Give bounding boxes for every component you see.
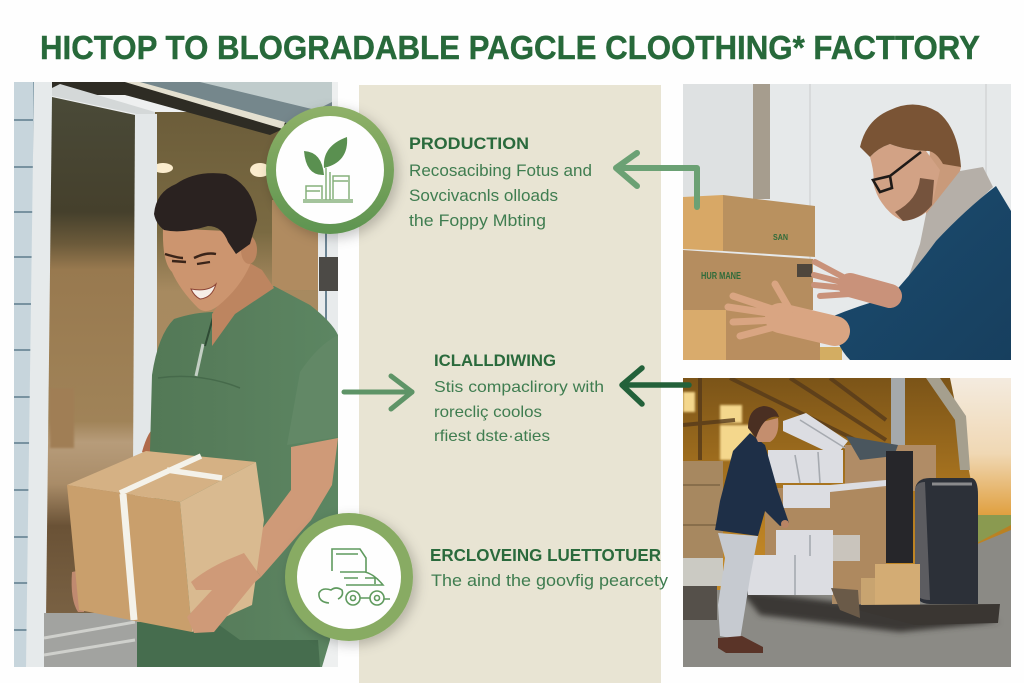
cabinet seen through pane [49,423,75,449]
forearm [256,438,338,577]
eyes and brows [165,254,216,264]
carton labels: HUR MANE [701,271,741,282]
interior right pane [155,112,318,352]
grass verge [973,515,1011,545]
text block: delivery [430,545,669,590]
forklift platform [858,604,1000,625]
upper hand [814,262,890,296]
text block: compliance [434,352,604,445]
shoes [718,636,763,653]
heading: ERCLOVEING LUETTOTUER [430,545,661,565]
carton labels: SAN [773,233,788,242]
hem seam [158,376,240,388]
zip placket [196,344,203,376]
roof trusses [683,378,886,460]
icon: document and truck outline [319,549,390,605]
wall column [753,84,770,199]
body copy: Recosacibing Fotus and [409,162,592,180]
scarf [906,167,993,284]
neckline [204,318,212,346]
trousers [718,533,758,640]
face [163,228,250,311]
hair [748,406,779,438]
siding on the left wall [14,82,34,667]
stacked brown cartons behind [683,461,723,561]
right door post [318,232,320,314]
arm behind parcel [142,432,150,452]
text block: production [409,134,592,230]
neck [212,262,274,346]
icon: production leaf badge [266,106,394,234]
body copy [434,379,604,445]
neck [926,150,961,215]
heading: ICLALLDIWING [434,352,556,370]
body copy: rorecliç coolos [434,404,542,421]
door header [52,82,332,135]
body copy: the Foppy Mbting [409,212,546,230]
body copy: Stis compaclirory with [434,379,604,396]
hair [860,104,961,167]
smile [191,284,216,299]
man in dark jacket [715,406,789,653]
torso in green scrubs [137,286,338,667]
photo: man lifting cartons [683,84,1011,360]
inner door post [133,114,157,470]
heading: PRODUCTION [409,134,529,153]
hand [781,520,789,528]
truck bed [683,558,723,586]
body copy: Sovcivacnls olloads [409,187,558,205]
ceiling lights [153,163,270,177]
man [728,104,1011,360]
photo: worker holding parcel at doorway [14,82,338,667]
tape [120,456,222,493]
glasses [873,152,921,192]
parcel [67,451,264,632]
head [750,418,778,442]
photo: warehouse pallet loading [683,378,1011,667]
canopy beam [926,378,970,470]
jacket [715,433,789,536]
ear [241,236,257,264]
interior left pane [46,97,135,620]
dark wrap on top [846,436,898,460]
icon: leaves and boxes [303,137,353,202]
threshold floor [44,613,140,667]
arrow: from worker to compliance [344,376,412,409]
face [870,144,940,221]
ground [683,530,1011,667]
wrapped white parcels [748,413,886,595]
small parcel [861,578,875,606]
arrow: from top photo to production [616,153,697,207]
navy jacket [831,186,1011,360]
body copy: The aind the goovfig pearcety [431,572,669,590]
panel: beige centre column [359,85,661,683]
icon: delivery vehicle badge [285,513,413,641]
pallet shadow [740,590,1000,632]
bright windows [683,392,752,460]
pants [137,622,320,667]
latch plate [319,257,338,291]
body copy: rfiest dste·aties [434,428,550,445]
main pallet load [748,413,936,604]
lower hand and forearm [728,284,835,336]
hair [154,173,257,254]
beard [895,178,934,221]
cartons [683,195,842,360]
worker [67,173,338,667]
sky through opening [950,378,1011,515]
door frame [26,82,35,667]
arrow: from warehouse to compliance [622,368,689,404]
carton labels [701,233,788,282]
hand on parcel [187,553,261,633]
sleeve shading [287,335,338,445]
forklift machinery [831,451,1000,625]
steel post [891,378,905,448]
body copy [409,162,592,230]
wall panel at right of interior [272,200,318,290]
title: HICTOP TO BLOGRADABLE PAGCLE CLOOTHING* FACTTORY [40,29,980,66]
